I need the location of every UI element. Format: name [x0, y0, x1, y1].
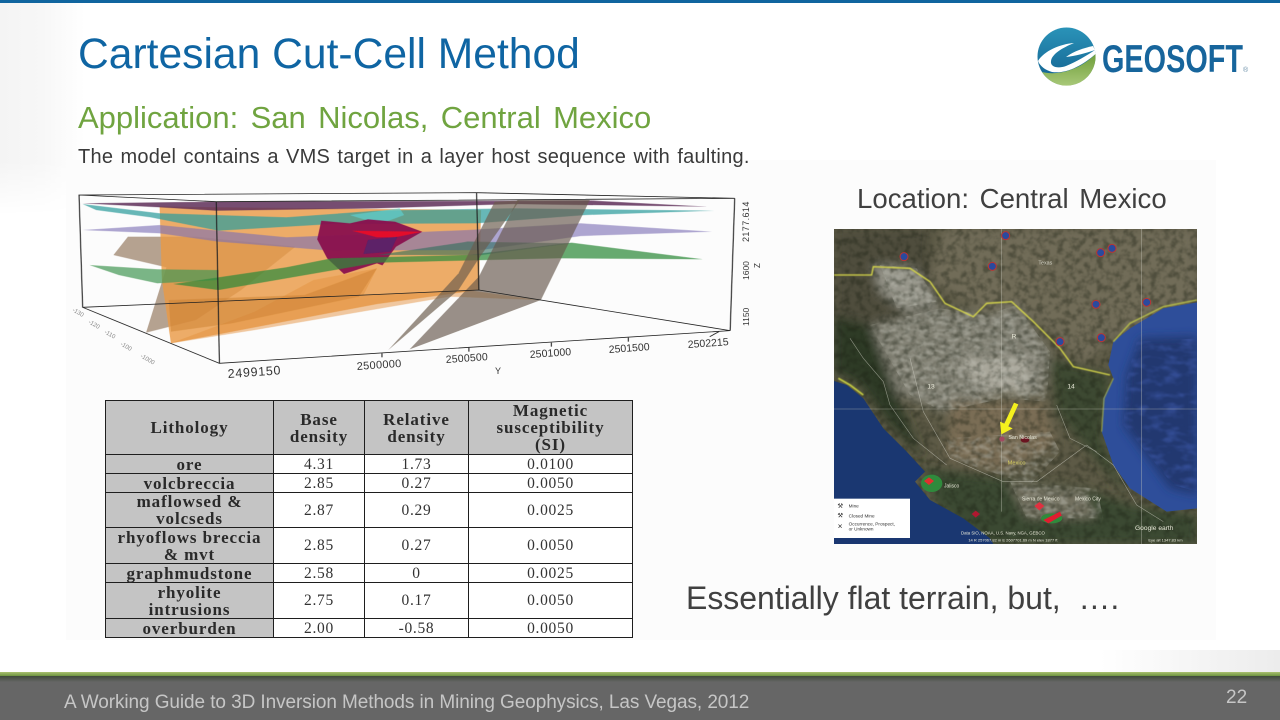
map legend: ✕	[837, 523, 843, 530]
callout text: Essentially flat terrain, but, ….	[686, 580, 1119, 616]
lithology table: Base	[300, 410, 338, 428]
orange sheet lower	[171, 268, 540, 343]
deep gulf shading	[1123, 337, 1197, 495]
lithology table	[105, 400, 633, 638]
land base	[834, 229, 1197, 544]
border line	[834, 267, 1110, 375]
lithology table: Magnetic	[513, 401, 588, 420]
lithology table: 0.0050	[527, 592, 574, 609]
map legend: ⚒	[837, 502, 843, 510]
lithology table: 4.31	[304, 456, 334, 472]
axis labels: -100	[119, 342, 133, 353]
place labels: Texas	[1038, 261, 1053, 267]
place labels: 13	[927, 384, 935, 391]
axis labels: -130	[71, 308, 85, 319]
footer	[0, 672, 1280, 720]
lithology table: ore	[176, 454, 202, 474]
state lines	[834, 229, 1197, 544]
axis labels: 1150	[741, 307, 751, 326]
lithology table: & mvt	[164, 544, 215, 564]
page number: 22	[1226, 687, 1247, 708]
lithology table: 0.17	[402, 592, 431, 609]
orange sheet	[160, 207, 481, 343]
lithology table: 2.85	[304, 474, 334, 492]
terrain colours	[834, 229, 1197, 544]
lithology table: graphmudstone	[126, 564, 252, 582]
axis labels: -1000	[139, 354, 156, 367]
place labels: Eye alt 1347.83 km	[1148, 538, 1183, 543]
fault plane B	[388, 201, 520, 350]
axis labels: 2501000	[529, 346, 572, 361]
coast highlight	[1113, 300, 1197, 342]
map legend: Closed Mine	[849, 513, 875, 518]
lithology table: 0.0050	[527, 620, 574, 636]
axis labels: 2500000	[356, 358, 402, 373]
map legend: ⚒	[837, 512, 843, 520]
orange fold	[169, 268, 377, 332]
axis labels: 2177.614	[741, 201, 751, 242]
geological surfaces	[79, 193, 735, 363]
purple layer	[83, 223, 712, 251]
lithology table: 0	[412, 564, 421, 582]
axis labels: -120	[87, 320, 101, 331]
lithology table: rhyolite	[158, 582, 221, 602]
lithology table: 0.0100	[527, 456, 574, 472]
place labels: Sierra de Mexico	[1022, 497, 1060, 503]
axis labels	[71, 201, 762, 381]
lithology table: 0.27	[402, 474, 431, 492]
place labels: Mexico City	[1075, 496, 1101, 502]
Gulf of Mexico	[1102, 302, 1197, 512]
lithology table: rhyoflows breccia	[118, 528, 261, 546]
map legend	[834, 499, 910, 538]
lithology table: (SI)	[535, 435, 566, 454]
axis labels: Y	[495, 366, 501, 376]
icon: globe	[1038, 28, 1096, 86]
Pacific ocean	[834, 381, 993, 544]
lithology table: intrusions	[149, 600, 230, 618]
3D model chart	[71, 192, 1150, 514]
footer citation: A Working Guide to 3D Inversion Methods in Mining Geophysics, Las Vegas, 2012	[64, 692, 749, 713]
place labels: Google earth	[1135, 525, 1174, 532]
lithology table: 2.87	[304, 502, 334, 518]
green layer main	[173, 243, 703, 290]
ore red streak	[352, 231, 422, 237]
lithology table: density	[290, 426, 348, 446]
lithology table: 2.00	[304, 620, 334, 636]
axis labels: 2502215	[687, 336, 729, 351]
road shields	[900, 232, 1151, 346]
teal band mid-right	[377, 242, 572, 255]
axis labels: 2499150	[227, 363, 282, 381]
axis labels: 2500500	[445, 351, 488, 366]
light teal highlight	[350, 208, 404, 222]
title: Cartesian Cut-Cell Method	[78, 30, 580, 78]
place labels	[927, 261, 1183, 543]
green layer left	[89, 265, 218, 283]
lithology table: 0.0025	[527, 564, 574, 582]
ocean texture	[1123, 338, 1197, 492]
lithology table: 1.73	[402, 456, 431, 472]
red top layer	[83, 201, 708, 211]
lithology table: 0.0050	[527, 474, 574, 492]
subtitle: Application: San Nicolas, Central Mexico	[78, 100, 651, 135]
tan layer	[113, 237, 295, 333]
place labels: San Nicolas	[1008, 435, 1037, 441]
lithology table: density	[387, 426, 446, 446]
terrain texture pale patches	[870, 265, 1103, 518]
lithology table: 0.0050	[527, 537, 574, 554]
lithology table: 2.58	[304, 564, 334, 582]
map legend: or Unknown	[849, 527, 874, 532]
lithology table: Relative	[383, 410, 450, 428]
ore body	[317, 219, 422, 274]
lithology table: volcseds	[156, 509, 223, 528]
place labels: 14	[1067, 384, 1075, 391]
fault plane A	[410, 200, 590, 349]
ore purple core	[363, 237, 397, 254]
lithology table: -0.58	[399, 620, 434, 636]
satellite map	[834, 229, 1197, 544]
yellow arrow	[1000, 403, 1018, 434]
lithology table: maflowsed &	[137, 492, 242, 511]
map legend: Mine	[849, 504, 859, 509]
lithology table: 0.27	[402, 537, 431, 554]
place labels: 14 R 257067.82 m E 2607701.69 m N elev 1877 ft	[968, 538, 1058, 543]
axis labels: 2501500	[608, 341, 650, 356]
registered mark: ®	[1243, 66, 1249, 74]
place labels: Mexico	[1008, 461, 1026, 467]
place labels: Jalisco	[944, 484, 960, 490]
place labels: R	[1012, 334, 1017, 341]
teal layer	[83, 204, 714, 231]
lithology table: 0.29	[402, 502, 431, 518]
lithology table: volcbreccia	[144, 474, 235, 492]
lithology table: 2.75	[304, 592, 334, 609]
location heading: Location: Central Mexico	[857, 183, 1167, 214]
terrain texture dark	[834, 229, 1197, 544]
lithology table: Lithology	[150, 418, 228, 437]
lithology table: susceptibility	[496, 418, 604, 437]
lithology table: 0.0025	[527, 502, 574, 518]
place labels: Data SIO, NOAA, U.S. Navy, NGA, GEBCO	[961, 530, 1045, 535]
axis labels: Z	[753, 263, 762, 268]
description text: The model contains a VMS target in a layer host sequence with faulting.	[78, 146, 750, 168]
axis labels: 1600	[741, 261, 751, 280]
logo: Geosoft	[1038, 28, 1249, 86]
mine markers	[921, 436, 1062, 523]
lithology table: 2.85	[304, 537, 334, 554]
map legend: Occurrence, Prospect,	[849, 522, 895, 527]
axis labels: -110	[103, 330, 117, 341]
box frame	[79, 193, 735, 363]
lithology table: overburden	[142, 618, 236, 638]
